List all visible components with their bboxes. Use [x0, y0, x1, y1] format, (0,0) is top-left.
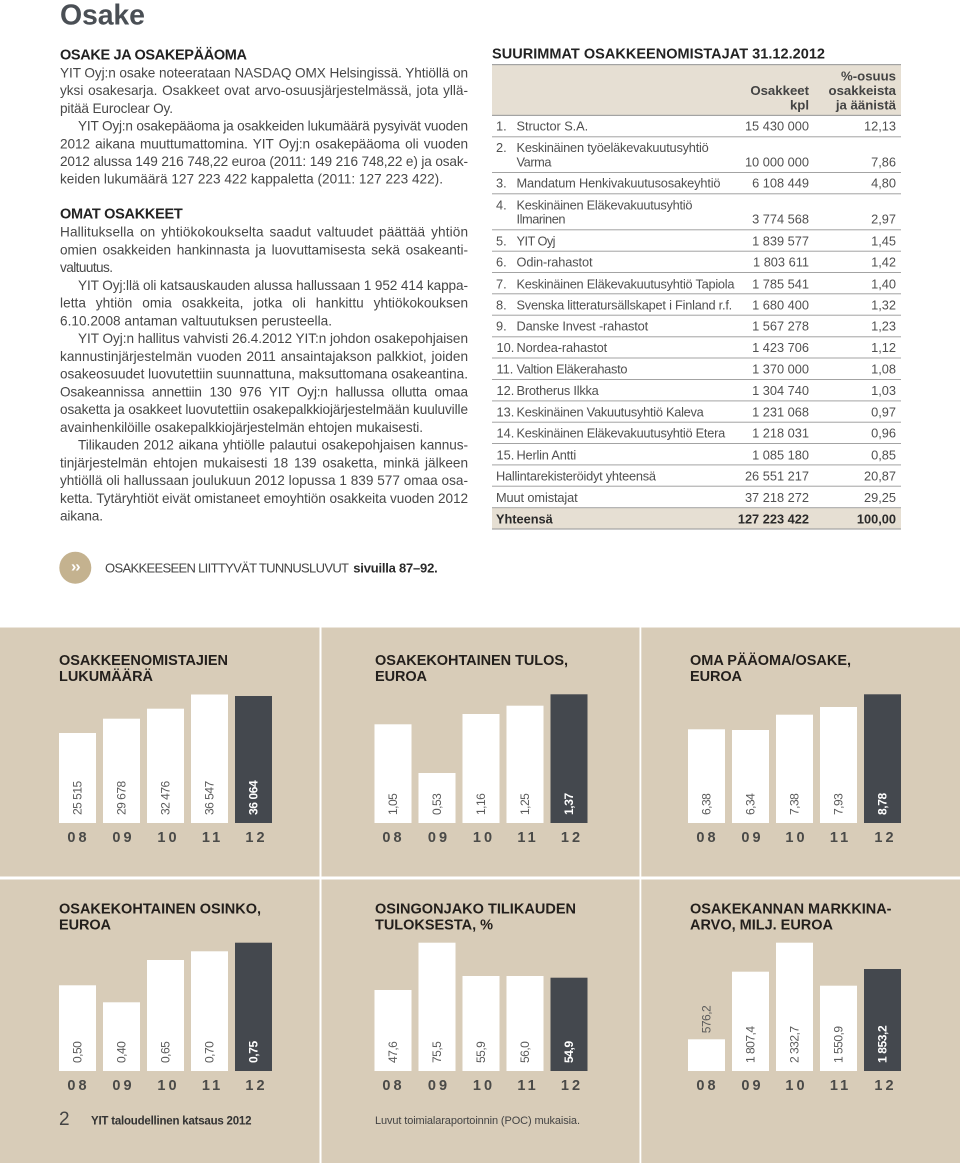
- row 2: Varma: [516, 154, 552, 169]
- chart title: OSINGONJAKO TILIKAUDEN: [375, 901, 576, 917]
- row 12: 1,03: [871, 383, 896, 398]
- chart title: EUROA: [59, 917, 112, 933]
- chart title: EUROA: [690, 669, 743, 685]
- row 8: [492, 297, 901, 316]
- chart title: [690, 652, 851, 685]
- row 9: 9.: [496, 319, 507, 334]
- body text: omat osakkeet: omien osakkeiden hankinnasta ja luovuttamisesta sekä osakeanti-: [60, 242, 468, 258]
- year axis: 08: [67, 1078, 90, 1094]
- callout: key figures reference: [59, 552, 438, 584]
- bar chart: 29 678: [114, 780, 128, 815]
- row 11: [492, 362, 901, 380]
- bar chart: 25 515: [70, 780, 84, 815]
- bar chart: [688, 943, 901, 1071]
- row 4: 2,97: [871, 212, 896, 227]
- bar chart: [688, 694, 901, 823]
- year axis: 12: [874, 1078, 897, 1094]
- body text: omat osakkeet: letta yhtiön omia osakkeita, jotka oli hankittu yhtiökokouksen: [60, 296, 468, 311]
- year axis: 09: [741, 830, 764, 846]
- year axis: 08: [382, 1078, 405, 1094]
- row 10: [492, 340, 901, 358]
- row 10: 1,12: [871, 340, 896, 355]
- panel: osingonjako tilikauden tuloksesta: [322, 880, 640, 1163]
- row 1: 15 430 000: [745, 119, 809, 134]
- icon: chevrons in circle: [59, 552, 91, 584]
- row 15: Herlin Antti: [516, 447, 576, 462]
- row 8: 8.: [496, 297, 507, 312]
- row 7: Keskinäinen Eläkevakuutusyhtiö Tapiola: [516, 276, 735, 291]
- body text: osake ja osakepääoma: 2012 alussa 149 216 748,22 euroa (2011: 149 216 748,22 e) ja osak-: [60, 154, 468, 169]
- row 1: Structor S.A.: [516, 119, 588, 134]
- title: Osake: [60, 0, 145, 32]
- panel: osakekannan markkina-arvo: [641, 880, 960, 1163]
- table header row: ja äänistä: [835, 98, 897, 112]
- body text: omat osakkeet: osaketta ja osakkeet luovutettiin osakepalkkiojärjestelmään kuuluville: [60, 402, 468, 417]
- row 7: 1 785 541: [752, 276, 809, 291]
- year axis: 09: [428, 830, 450, 846]
- chart title: [59, 901, 261, 933]
- row 7: 1,40: [871, 276, 896, 291]
- row 4: 4.: [496, 197, 507, 212]
- chart title: EUROA: [375, 669, 428, 685]
- bar chart: 1,05: [386, 793, 400, 815]
- text block: omat osakkeet: [60, 206, 468, 524]
- table heading: SUURIMMAT OSAKKEENOMISTAJAT 31.12.2012: [492, 47, 825, 63]
- year axis: [696, 1078, 897, 1094]
- row 13: 0,97: [871, 404, 896, 419]
- bar chart: 0,70: [202, 1041, 216, 1063]
- bar chart: 54,9: [562, 1041, 576, 1063]
- row 5: YIT Oyj: [516, 233, 556, 248]
- chart title: OSAKKEENOMISTAJIEN: [59, 653, 228, 669]
- chart title: [375, 653, 568, 685]
- bar chart: 36 064: [246, 780, 260, 815]
- row 8: 1 680 400: [752, 297, 809, 312]
- row 3: [492, 176, 901, 194]
- table header row: [492, 64, 901, 116]
- chart title: OMA PÄÄOMA/OSAKE,: [690, 652, 851, 669]
- row 13: 13.: [496, 404, 514, 419]
- row 14: 14.: [496, 426, 514, 441]
- panel: osakekohtainen tulos: [322, 628, 640, 876]
- bar chart: 0,65: [158, 1041, 172, 1063]
- heading: omat osakkeet: OMAT OSAKKEET: [60, 206, 183, 222]
- year axis: 09: [112, 830, 135, 846]
- year axis: [67, 830, 268, 846]
- bar chart: 56,0: [518, 1041, 532, 1063]
- body text: omat osakkeet: tinjärjestelmän ehtojen mukaisesti 18 139 osaketta, minkä jälkeen: [60, 456, 468, 470]
- year axis: 12: [245, 830, 268, 846]
- row 5: 1,45: [871, 233, 896, 248]
- bar chart: 32 476: [158, 780, 172, 815]
- row 6: [492, 255, 901, 273]
- row 9: Danske Invest -rahastot: [516, 319, 649, 334]
- year axis: [67, 1078, 268, 1094]
- year axis: 09: [428, 1078, 450, 1094]
- year axis: 10: [157, 830, 180, 846]
- row 9: 1 567 278: [752, 319, 809, 334]
- body text: omat osakkeet: Tilikauden 2012 aikana yhtiölle palautui osakepohjaisen kannus-: [78, 438, 468, 453]
- row 14: Keskinäinen Eläkevakuutusyhtiö Etera: [516, 426, 726, 441]
- bar chart: 0,53: [430, 793, 444, 815]
- row 13: 1 231 068: [752, 404, 809, 419]
- heading: osake ja osakepääoma: OSAKE JA OSAKEPÄÄOMA: [60, 46, 248, 64]
- bar chart: 0,75: [246, 1041, 260, 1063]
- year axis: 08: [382, 830, 405, 846]
- footnote: Luvut toimialaraportoinnin (POC) mukaisia.: [375, 1115, 580, 1127]
- body text: osake ja osakepääoma: YIT Oyj:n osakepääoma ja osakkeiden lukumäärä pysyivät vuoden: [78, 119, 468, 134]
- row 2: 10 000 000: [745, 154, 809, 169]
- row: other owners: Muut omistajat: [496, 490, 578, 505]
- body text: omat osakkeet: Osakeannissa annettiin 130 976 YIT Oyj:n hallussa ollutta omaa: [60, 384, 468, 400]
- row 6: 6.: [496, 255, 507, 270]
- row 3: 4,80: [871, 176, 896, 191]
- year axis: 11: [517, 1078, 539, 1094]
- chart title: [690, 901, 892, 933]
- bar chart: [374, 943, 588, 1071]
- year axis: 11: [830, 1078, 851, 1094]
- year axis: 12: [245, 1078, 268, 1094]
- bar chart: 1,37: [562, 793, 576, 815]
- table header row: kpl: [790, 98, 809, 112]
- row 7: 7.: [496, 276, 507, 291]
- bar chart: [374, 694, 588, 823]
- row 1: 1.: [496, 119, 507, 134]
- body text: osake ja osakepääoma: [60, 66, 468, 186]
- body text: omat osakkeet: aikana.: [60, 509, 103, 524]
- row 3: Mandatum Henkivakuutusosakeyhtiö: [516, 176, 720, 191]
- chart title: [375, 901, 576, 933]
- year axis: 12: [561, 830, 583, 846]
- row 9: 1,23: [871, 319, 896, 334]
- year axis: [696, 830, 897, 846]
- row 2: 7,86: [871, 154, 896, 169]
- panel: oma pääoma per osake: [641, 628, 960, 876]
- body text: omat osakkeet: yhtiöllä oli hallussaan joulukuun 2012 lopussa 1 839 577 omaa osa-: [60, 473, 468, 488]
- row 11: 1 370 000: [752, 362, 809, 377]
- row 15: 15.: [496, 447, 514, 462]
- bar chart: 0,40: [114, 1041, 128, 1063]
- bar chart: 1,16: [474, 793, 488, 815]
- bar chart: 576,2: [700, 1005, 714, 1033]
- row 14: [492, 426, 901, 444]
- row 10: 1 423 706: [752, 340, 809, 355]
- year axis: 12: [561, 1078, 583, 1094]
- row 9: [492, 319, 901, 337]
- row 12: [492, 383, 901, 401]
- body text: omat osakkeet: valtuutus.: [60, 260, 113, 275]
- row: nominee registered: 20,87: [864, 469, 896, 484]
- bar chart: 36 547: [202, 780, 216, 815]
- bar chart: 8,78: [876, 793, 890, 815]
- row 13: [492, 404, 901, 423]
- row 15: [492, 447, 901, 465]
- year axis: [382, 1078, 583, 1094]
- row 13: Keskinäinen Vakuutusyhtiö Kaleva: [516, 404, 705, 419]
- body text: omat osakkeet: ketta. Tytäryhtiöt eivät omistaneet emoyhtiön osakkeita vuoden 2012: [60, 491, 468, 506]
- bar chart: 1 550,9: [832, 1026, 846, 1063]
- year axis: 08: [696, 830, 719, 846]
- chart title: LUKUMÄÄRÄ: [59, 668, 154, 685]
- row 8: Svenska litteratursällskapet i Finland r.f.: [516, 297, 732, 312]
- body text: osake ja osakepääoma: keiden lukumäärä 127 223 422 kappaletta (2011: 127 223 422).: [60, 172, 443, 186]
- row 6: 1 803 611: [753, 255, 809, 270]
- chart title: ARVO, MILJ. EUROA: [690, 917, 834, 933]
- row 14: 0,96: [871, 426, 896, 441]
- year axis: 09: [112, 1078, 135, 1094]
- body text: osake ja osakepääoma: pitää Euroclear Oy.: [60, 101, 173, 116]
- row: nominee registered: Hallintarekisteröidyt yhteensä: [496, 469, 657, 484]
- panel: largest shareholders table: [492, 47, 901, 530]
- row 2: Keskinäinen työeläkevakuutusyhtiö: [516, 140, 709, 155]
- callout page reference: sivuilla 87–92.: [353, 561, 438, 576]
- body text: osake ja osakepääoma: 2012 aikana muuttumattomina. YIT Oyj:n osakepääoma oli vuoden: [60, 136, 468, 152]
- bar chart: [59, 694, 272, 823]
- row 12: 12.: [496, 383, 514, 398]
- table header row: %-osuus: [841, 68, 896, 84]
- body text: omat osakkeet: Hallituksella on yhtiökokoukselta saadut valtuudet päättää yhtiön: [60, 225, 468, 240]
- bar chart: 1 807,4: [744, 1026, 758, 1063]
- body text: omat osakkeet: osakeosuudet luovutettiin suunnattuna, maksuttomana osakeantina.: [60, 367, 468, 382]
- body text: omat osakkeet: [60, 225, 468, 524]
- page number: 2: [59, 1109, 70, 1130]
- body text: omat osakkeet: avainhenkilöille osakepalkkiojärjestelmän ehtojen mukaisesti.: [60, 420, 423, 435]
- row: other owners: [496, 490, 896, 505]
- chart title: OSAKEKANNAN MARKKINA-: [690, 901, 892, 917]
- table header row: osakkeista: [829, 83, 897, 98]
- row 2: 2.: [496, 140, 507, 155]
- text block: osake ja osakepääoma: [60, 46, 468, 186]
- year axis: 10: [473, 1078, 495, 1094]
- row 1: [492, 119, 901, 137]
- bar chart: 1,25: [518, 793, 532, 815]
- body text: omat osakkeet: YIT Oyj:llä oli katsauskauden alussa hallussaan 1 952 414 kappa-: [78, 278, 468, 293]
- row 10: 10.: [496, 340, 514, 355]
- chart title: TULOKSESTA, %: [375, 917, 493, 933]
- year axis: 11: [202, 830, 223, 846]
- body text: osake ja osakepääoma: YIT Oyj:n osake noteerataan NASDAQ OMX Helsingissä. Yhtiöllä on: [60, 66, 468, 80]
- row: nominee registered: [492, 469, 901, 487]
- row 12: Brotherus Ilkka: [516, 383, 600, 398]
- row: total: Yhteensä: [496, 511, 554, 526]
- bar chart: 7,38: [788, 793, 802, 815]
- row 11: 1,08: [871, 362, 896, 377]
- year axis: 10: [157, 1078, 180, 1094]
- row: total: 127 223 422: [738, 511, 809, 526]
- row 5: 1 839 577: [752, 233, 809, 248]
- row 10: Nordea-rahastot: [516, 340, 608, 355]
- row 1: 12,13: [864, 119, 896, 134]
- row 8: 1,32: [871, 297, 896, 312]
- year axis: 08: [67, 830, 90, 846]
- row 5: [492, 233, 901, 252]
- row: total: [492, 507, 901, 530]
- chart title: OSAKEKOHTAINEN TULOS,: [375, 653, 568, 669]
- year axis: 10: [473, 830, 495, 846]
- row 7: [492, 276, 901, 294]
- row: other owners: 29,25: [864, 490, 896, 505]
- year axis: 10: [785, 1078, 808, 1094]
- row 6: Odin-rahastot: [516, 255, 593, 270]
- body text: omat osakkeet: YIT Oyj:n hallitus vahvisti 26.4.2012 YIT:n johdon osakepohjaisen: [78, 331, 468, 346]
- table header row: Osakkeet: [750, 83, 810, 98]
- row 4: Ilmarinen: [516, 212, 566, 227]
- bar chart: 1 853,2: [876, 1025, 890, 1063]
- body text: osake ja osakepääoma: yksi osakesarja. Osakkeet ovat arvo-osuusjärjestelmässä, jota yllä-: [60, 83, 468, 98]
- bar chart: 7,93: [832, 793, 846, 815]
- row 3: 3.: [496, 176, 507, 191]
- bar chart: 0,50: [70, 1041, 84, 1063]
- panel: osakkeenomistajien lukumäärä: [0, 628, 320, 876]
- row 6: 1,42: [871, 255, 896, 270]
- year axis: 11: [830, 830, 851, 846]
- bar chart: 55,9: [474, 1041, 488, 1063]
- callout text: OSAKKEESEEN LIITTYVÄT TUNNUSLUVUT: [105, 561, 349, 576]
- year axis: [382, 830, 583, 846]
- year axis: 11: [517, 830, 539, 846]
- bar chart: 6,38: [700, 793, 714, 815]
- row 12: 1 304 740: [752, 383, 809, 398]
- bar chart: 47,6: [386, 1041, 400, 1063]
- row 2: [492, 140, 901, 173]
- publication name: YIT taloudellinen katsaus 2012: [91, 1116, 252, 1128]
- row: total: 100,00: [857, 511, 896, 526]
- bar chart: [59, 943, 272, 1071]
- bar chart: 6,34: [744, 793, 758, 815]
- year axis: 12: [874, 830, 897, 846]
- chart title: [59, 653, 228, 685]
- row 11: Valtion Eläkerahasto: [516, 362, 628, 377]
- row 3: 6 108 449: [752, 176, 809, 191]
- year axis: 09: [741, 1078, 764, 1094]
- panel: osakekohtainen osinko: [0, 880, 320, 1163]
- year axis: 11: [202, 1078, 223, 1094]
- row 4: Keskinäinen Eläkevakuutusyhtiö: [516, 197, 692, 212]
- bar chart: 75,5: [430, 1041, 444, 1063]
- row 15: 0,85: [871, 447, 896, 462]
- row 11: 11.: [496, 362, 513, 377]
- row 5: 5.: [496, 233, 507, 248]
- body text: omat osakkeet: kannustinjärjestelmän vuoden 2011 ansaintajakson palkkiot, joiden: [60, 349, 468, 364]
- row 4: 3 774 568: [752, 212, 809, 227]
- bar chart: 2 332,7: [788, 1026, 802, 1063]
- year axis: 10: [785, 830, 808, 846]
- year axis: 08: [696, 1078, 719, 1094]
- chart title: OSAKEKOHTAINEN OSINKO,: [59, 901, 261, 917]
- body text: omat osakkeet: 6.10.2008 antaman valtuutuksen perusteella.: [60, 314, 332, 328]
- icon: chevrons in circle: ››: [71, 558, 80, 576]
- row 14: 1 218 031: [752, 426, 809, 441]
- row: nominee registered: 26 551 217: [745, 469, 809, 484]
- row: other owners: 37 218 272: [745, 490, 809, 505]
- row 15: 1 085 180: [752, 447, 809, 462]
- row 4: [492, 197, 901, 230]
